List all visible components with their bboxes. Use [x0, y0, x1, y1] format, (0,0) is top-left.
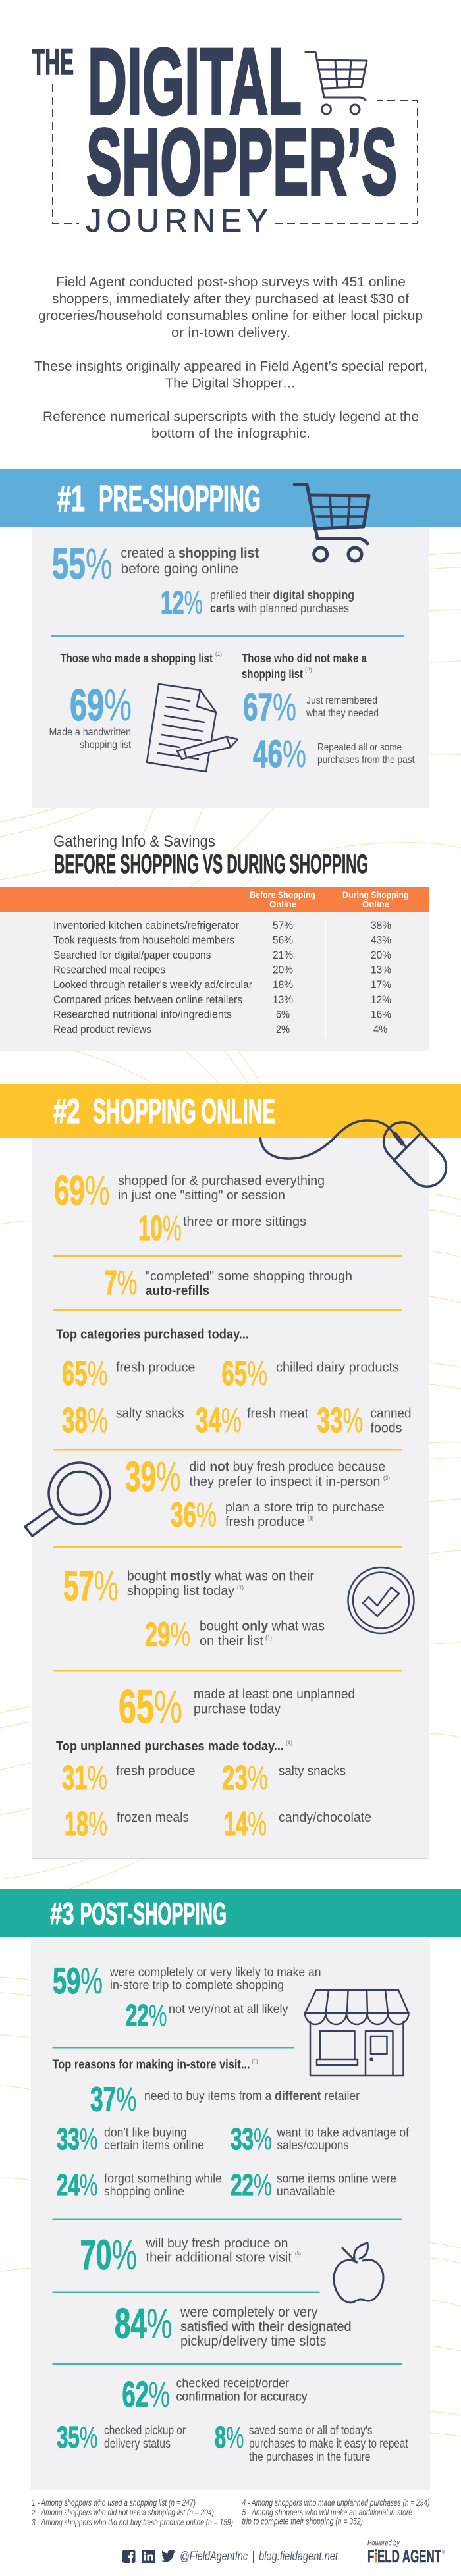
stat: 39% did not buy fresh produce: they prefer to inspect it in-person	[190, 1475, 381, 1489]
stat: 38% salty snacks: salty snacks	[116, 1406, 184, 1421]
icon: store front	[305, 1990, 408, 2076]
heading: #2 Shopping Online: SHOPPING ONLINE	[93, 1092, 275, 1131]
stat: 67% just remembered	[243, 686, 379, 729]
stat: 31% fresh produce: fresh produce	[116, 1764, 195, 1779]
section band: post-shopping	[0, 1889, 461, 1937]
stat: 84% satisfied with time slots: 84%	[115, 2300, 173, 2348]
stat: 70% fresh produce in store: will buy fresh produce on	[146, 2236, 288, 2251]
icon: apple	[334, 2243, 383, 2303]
heading: #3 Post-Shopping: POST-SHOPPING	[80, 1896, 227, 1931]
stat: 31% fresh produce: 31%	[62, 1759, 107, 1797]
stat: 12% prefilled carts: 12%	[161, 585, 203, 621]
intro text	[34, 275, 427, 441]
stat: 36% plan a store trip: fresh produce	[225, 1515, 304, 1529]
stat: 46% repeated purchases	[253, 733, 415, 775]
intro text: shoppers, immediately after they purchased at least $30 of	[52, 292, 409, 307]
stat: 29% bought only list: bought only what was	[200, 1619, 325, 1634]
stat: 70% fresh produce in store: 70%	[80, 2231, 137, 2278]
panel: shopping online	[32, 1138, 429, 1858]
stat: 62% checked receipt: 62%	[122, 2374, 170, 2415]
stat: 57% bought mostly list: (1)	[237, 1584, 244, 1590]
stat: 65% fresh produce: fresh produce	[116, 1360, 195, 1375]
stat: 12% prefilled carts: prefilled their digital shopping	[210, 589, 354, 602]
heading: #2 Shopping Online	[53, 1092, 275, 1131]
stat: 70% fresh produce in store	[80, 2231, 301, 2278]
heading: those who did not make a list: (2)	[305, 666, 312, 673]
stat: 84% satisfied with time slots	[115, 2300, 352, 2349]
stat: 65% unplanned purchase	[119, 1681, 355, 1733]
stat: 65% fresh produce	[62, 1355, 195, 1393]
stat: 24% forgot something: shopping online	[104, 2184, 184, 2199]
stat: 22% items unavailable: some items online were	[277, 2171, 396, 2186]
stat: 55% created a shopping list: before going online	[121, 562, 238, 577]
stat: 33% don't like buying online: certain items online	[104, 2138, 204, 2153]
stat group: unplanned purchases	[62, 1759, 371, 1843]
heading: gathering info and savings	[53, 833, 368, 879]
section band: shopping online	[0, 1084, 461, 1138]
stat: 7% auto-refills: 7%	[104, 1264, 137, 1302]
intro text: or in-town delivery.	[171, 326, 290, 340]
icon: magnifying glass	[25, 1463, 110, 1536]
stat: 69% one sitting: in just one "sitting" or session	[118, 1188, 285, 1203]
heading: gathering info and savings: Gathering Info & Savings	[53, 833, 215, 851]
logo: powered by Field Agent	[367, 2538, 445, 2566]
stat: 33% sales and coupons	[230, 2122, 410, 2156]
stat: 37% different retailer: need to buy items from a different retailer	[144, 2089, 360, 2103]
title word: JOURNEY: JOURNEY	[86, 203, 268, 239]
stat: 55% created a shopping list: created a shopping list	[121, 546, 259, 561]
heading: top reasons for in-store visit: (5)	[252, 2058, 258, 2064]
stat: 65% chilled dairy: 65%	[221, 1355, 267, 1393]
stat: 18% frozen meals	[65, 1805, 189, 1843]
table rows: 13%	[273, 993, 293, 1006]
stat: 38% salty snacks: 38%	[62, 1402, 108, 1440]
table rows: 13%	[371, 964, 391, 976]
table rows: Compared prices between online retailers	[53, 993, 242, 1006]
table header: Online	[362, 899, 389, 909]
table header: During Shopping	[342, 889, 408, 900]
stat: 69% handwritten list	[49, 680, 132, 750]
stat: 14% candy: candy/chocolate	[279, 1810, 371, 1825]
heading: #1 Pre-Shopping	[57, 478, 261, 519]
table header: Before Shopping	[250, 889, 315, 900]
stat: 8% saved purchases: 8%	[215, 2420, 244, 2454]
table header: Online	[269, 899, 296, 909]
stat: 84% satisfied with time slots: were completely or very	[180, 2305, 318, 2320]
intro text: groceries/household consumables online for either local pickup	[38, 309, 423, 323]
heading: those who did not make a list	[242, 652, 367, 681]
stat: 69% one sitting: shopped for & purchased everything	[118, 1174, 325, 1188]
heading: top categories purchased: Top categories purchased today...	[56, 1327, 249, 1342]
heading: those who made a shopping list: Those who made a shopping list	[61, 652, 213, 665]
stat: 18% frozen meals: 18%	[65, 1805, 107, 1843]
panel: pre-shopping	[32, 527, 429, 808]
heading: those who did not make a list: Those who did not make a	[242, 652, 367, 665]
stat: 70% fresh produce in store: their additional store visit	[146, 2250, 292, 2265]
social handle and blog	[180, 2550, 339, 2563]
dashed title frame	[53, 84, 418, 223]
table rows: 56%	[273, 933, 293, 947]
stat: 8% saved purchases: the purchases in the future	[249, 2450, 370, 2464]
stat: 62% checked receipt: checked receipt/order	[176, 2377, 289, 2391]
stat: 22% not likely	[126, 1998, 288, 2032]
study legend footnotes: 1 - Among shoppers who used a shopping list (n = 247)	[32, 2498, 196, 2508]
stat: 33% don't like buying online: don't like buying	[104, 2125, 187, 2140]
stat: 14% candy	[224, 1805, 371, 1843]
logo: powered by Field Agent: Powered by	[367, 2538, 400, 2548]
stat: 69% one sitting: 69%	[54, 1168, 109, 1214]
stat: 33% don't like buying online	[57, 2122, 204, 2156]
study legend footnotes	[31, 2498, 430, 2527]
table rows: Took requests from household members	[53, 933, 234, 947]
stat: 33% canned foods: canned	[370, 1406, 411, 1421]
stat: 24% forgot something: 24%	[57, 2168, 97, 2202]
social handle and blog: @FieldAgentInc	[180, 2550, 248, 2563]
table rows: 21%	[273, 949, 293, 961]
stat: 23% salty snacks: salty snacks	[279, 1764, 346, 1779]
stat: 8% saved purchases	[215, 2420, 408, 2464]
stat group: top categories	[62, 1355, 411, 1440]
stat: 70% fresh produce in store: (5)	[295, 2250, 301, 2257]
table rows: 18%	[273, 978, 293, 991]
title word: DIGITAL: DIGITAL	[88, 30, 302, 134]
section band: pre-shopping	[0, 469, 461, 527]
stat: 8% saved purchases: purchases to make it easy to repeat	[249, 2437, 408, 2451]
heading: #3 Post-Shopping: #3	[50, 1896, 74, 1931]
table rows: Researched meal recipes	[53, 964, 165, 976]
stat: 62% checked receipt	[122, 2374, 308, 2415]
stat: 65% unplanned purchase: purchase today	[194, 1701, 281, 1717]
stat: 29% bought only list: (1)	[265, 1634, 272, 1641]
stat: 12% prefilled carts: carts with planned purchases	[210, 602, 349, 615]
stat: 33% sales and coupons: want to take advantage of	[277, 2125, 410, 2140]
stat: 7% auto-refills: auto-refills	[146, 1284, 209, 1298]
logo: powered by Field Agent: ®	[442, 2550, 445, 2555]
stat: 22% items unavailable: 22%	[230, 2168, 272, 2202]
table rows: 6%	[276, 1009, 290, 1020]
stat: 69% one sitting	[54, 1168, 325, 1214]
table rows: 12%	[371, 993, 391, 1006]
panel: post-shopping	[31, 1938, 430, 2490]
social handle and blog: blog.fieldagent.net	[259, 2550, 339, 2563]
heading: those who made a shopping list: (1)	[215, 650, 222, 657]
stat: 10% three or more sittings: 10%	[138, 1209, 182, 1248]
stat: 35% checked status: checked pickup or	[104, 2424, 186, 2438]
stat: 36% plan a store trip: 36%	[171, 1496, 217, 1534]
social handle and blog: |	[252, 2550, 255, 2563]
stat: 46% repeated purchases: 46%	[253, 733, 306, 775]
study legend footnotes: 2 - Among shoppers who did not use a shopping list (n = 204)	[31, 2508, 214, 2517]
study legend footnotes: trip to complete their shopping (n = 352)	[242, 2516, 363, 2527]
heading: #1 Pre-Shopping: PRE-SHOPPING	[99, 478, 261, 519]
stat: 69% handwritten list: Made a handwritten	[49, 727, 131, 738]
stat: 36% plan a store trip: plan a store trip to purchase	[225, 1500, 385, 1515]
stat: 33% sales and coupons: 33%	[230, 2122, 272, 2156]
stat: 38% salty snacks	[62, 1402, 184, 1440]
stat: 29% bought only list: 29%	[145, 1616, 190, 1654]
heading: those who did not make a list: shopping list	[242, 668, 303, 681]
title word: THE: THE	[32, 41, 74, 82]
intro text: The Digital Shopper…	[165, 377, 296, 391]
intro text: These insights originally appeared in Field Agent’s special report,	[34, 359, 427, 374]
table rows: Looked through retailer's weekly ad/circular	[53, 978, 252, 991]
stat: 35% checked status: 35%	[57, 2420, 97, 2454]
icon: title shopping cart	[306, 52, 367, 114]
table rows: 57%	[273, 919, 293, 932]
stat: 33% canned foods	[317, 1402, 411, 1440]
stat: 14% candy: 14%	[224, 1805, 267, 1843]
table rows: 38%	[371, 919, 391, 932]
stat: 10% three or more sittings	[138, 1209, 306, 1248]
table rows: Inventoried kitchen cabinets/refrigerator	[53, 919, 239, 932]
study legend footnotes: 3 - Among shoppers who did not buy fresh produce online (n = 159)	[32, 2517, 233, 2527]
stat: 12% prefilled carts	[161, 585, 354, 621]
stat: 29% bought only list: on their list	[200, 1634, 263, 1648]
icon: check mark badge	[348, 1567, 414, 1633]
stat: 22% items unavailable	[230, 2168, 396, 2202]
stat: 46% repeated purchases: Repeated all or some	[317, 742, 402, 753]
stat: 7% auto-refills: "completed" some shopping through	[146, 1269, 352, 1284]
intro text: Field Agent conducted post-shop surveys with 451 online	[56, 275, 406, 290]
stat: 39% did not buy fresh produce: (3)	[383, 1475, 390, 1481]
stat: 57% bought mostly list: bought mostly what was on their	[127, 1569, 314, 1584]
stat: 23% salty snacks	[222, 1759, 346, 1797]
stat: 57% bought mostly list: shopping list today	[127, 1584, 234, 1598]
stat: 34% fresh meat: 34%	[196, 1402, 242, 1440]
stat: 67% just remembered: 67%	[243, 686, 296, 729]
stat: 84% satisfied with time slots: satisfied with their designated	[180, 2319, 352, 2334]
stat: 55% created a shopping list	[52, 539, 259, 588]
stat: 67% just remembered: what they needed	[306, 708, 379, 719]
icon: linkedin	[142, 2550, 155, 2563]
stat: 67% just remembered: Just remembered	[306, 695, 377, 706]
heading: top reasons for in-store visit: Top reasons for making in-store visit...	[53, 2058, 250, 2072]
stat: 39% did not buy fresh produce	[125, 1453, 390, 1500]
stat: 33% canned foods: foods	[370, 1421, 402, 1435]
stat: 59% likely in-store trip: 59%	[53, 1960, 103, 2001]
stat: 8% saved purchases: saved some or all of today's	[249, 2424, 373, 2438]
table rows	[53, 919, 391, 1036]
stat: 22% not likely: not very/not at all likely	[169, 2002, 288, 2016]
stat: 24% forgot something	[57, 2168, 222, 2202]
stat: 33% sales and coupons: sales/coupons	[277, 2138, 349, 2153]
stat: 33% canned foods: 33%	[317, 1402, 364, 1440]
stat: 22% items unavailable: unavailable	[277, 2184, 335, 2199]
icon: shopping cart	[294, 485, 369, 561]
stat: 39% did not buy fresh produce: did not buy fresh produce because	[190, 1460, 385, 1475]
stat: 39% did not buy fresh produce: 39%	[125, 1453, 180, 1500]
stat: 18% frozen meals: frozen meals	[117, 1810, 189, 1825]
stat: 37% different retailer	[90, 2080, 360, 2118]
stat: 57% bought mostly list	[63, 1562, 314, 1610]
stat: 36% plan a store trip: (3)	[308, 1515, 313, 1522]
heading: #3 Post-Shopping	[50, 1896, 227, 1931]
icon: document and pencil	[147, 684, 238, 772]
table header	[0, 887, 429, 912]
stat: 37% different retailer: 37%	[90, 2080, 137, 2118]
table: before vs during shopping	[0, 887, 429, 1051]
stat: 34% fresh meat	[196, 1402, 308, 1440]
stat: 59% likely in-store trip	[53, 1960, 321, 2001]
stat: 69% handwritten list: 69%	[70, 680, 132, 730]
table rows: Researched nutritional info/ingredients	[53, 1009, 232, 1020]
study legend footnotes: 5 - Among shoppers who will make an additional in-store	[242, 2508, 412, 2517]
stat: 84% satisfied with time slots: pickup/delivery time slots	[180, 2334, 327, 2349]
intro text: Reference numerical superscripts with the study legend at the	[43, 409, 419, 424]
table rows: 2%	[276, 1023, 290, 1036]
stat: 35% checked status: delivery status	[104, 2437, 171, 2451]
intro text: bottom of the infographic.	[151, 427, 310, 441]
title: The Digital Shopper's Journey	[32, 30, 397, 239]
table rows: 20%	[371, 949, 391, 961]
table rows: Read product reviews	[53, 1023, 151, 1036]
stat: 65% unplanned purchase: 65%	[119, 1681, 182, 1733]
stat: 36% plan a store trip	[171, 1496, 385, 1534]
stat: 31% fresh produce	[62, 1759, 195, 1797]
table rows: Searched for digital/paper coupons	[53, 949, 211, 961]
stat: 65% fresh produce: 65%	[62, 1355, 108, 1393]
stat: 24% forgot something: forgot something while	[104, 2171, 222, 2186]
table rows: 43%	[371, 933, 391, 947]
stat: 29% bought only list	[145, 1616, 325, 1654]
table rows: 17%	[371, 978, 391, 991]
stat: 7% auto-refills	[104, 1264, 352, 1302]
icon: twitter	[161, 2550, 176, 2562]
heading: #2 Shopping Online: #2	[53, 1092, 80, 1131]
table rows: 20%	[273, 964, 293, 976]
heading: #1 Pre-Shopping: #1	[57, 478, 85, 519]
icon: facebook	[122, 2550, 136, 2563]
stat: 10% three or more sittings: three or more sittings	[183, 1215, 306, 1229]
heading: top unplanned purchases: Top unplanned purchases made today...	[56, 1739, 284, 1754]
stat: 23% salty snacks: 23%	[222, 1759, 268, 1797]
stat: 65% chilled dairy: chilled dairy products	[276, 1360, 399, 1375]
heading: top unplanned purchases: (4)	[286, 1739, 292, 1746]
table rows: 16%	[371, 1009, 391, 1020]
stat: 34% fresh meat: fresh meat	[247, 1406, 308, 1421]
icon: computer mouse	[261, 1115, 454, 1194]
stat: 59% likely in-store trip: in-store trip to complete shopping	[110, 1978, 284, 1992]
table rows: 4%	[373, 1023, 387, 1036]
stat: 22% not likely: 22%	[126, 1998, 167, 2032]
stat: 69% handwritten list: shopping list	[80, 739, 132, 750]
stat: 33% don't like buying online: 33%	[57, 2122, 97, 2156]
stat: 65% unplanned purchase: made at least one unplanned	[194, 1687, 355, 1702]
stat: 57% bought mostly list: 57%	[63, 1562, 119, 1610]
stat: 59% likely in-store trip: were completely or very likely to make an	[109, 1965, 321, 1980]
stat: 46% repeated purchases: purchases from the past	[317, 754, 415, 766]
stat: 55% created a shopping list: 55%	[52, 539, 112, 588]
stat: 62% checked receipt: confirmation for accuracy	[176, 2390, 308, 2404]
stat: 35% checked status	[57, 2420, 186, 2454]
stat: 65% chilled dairy	[221, 1355, 399, 1393]
